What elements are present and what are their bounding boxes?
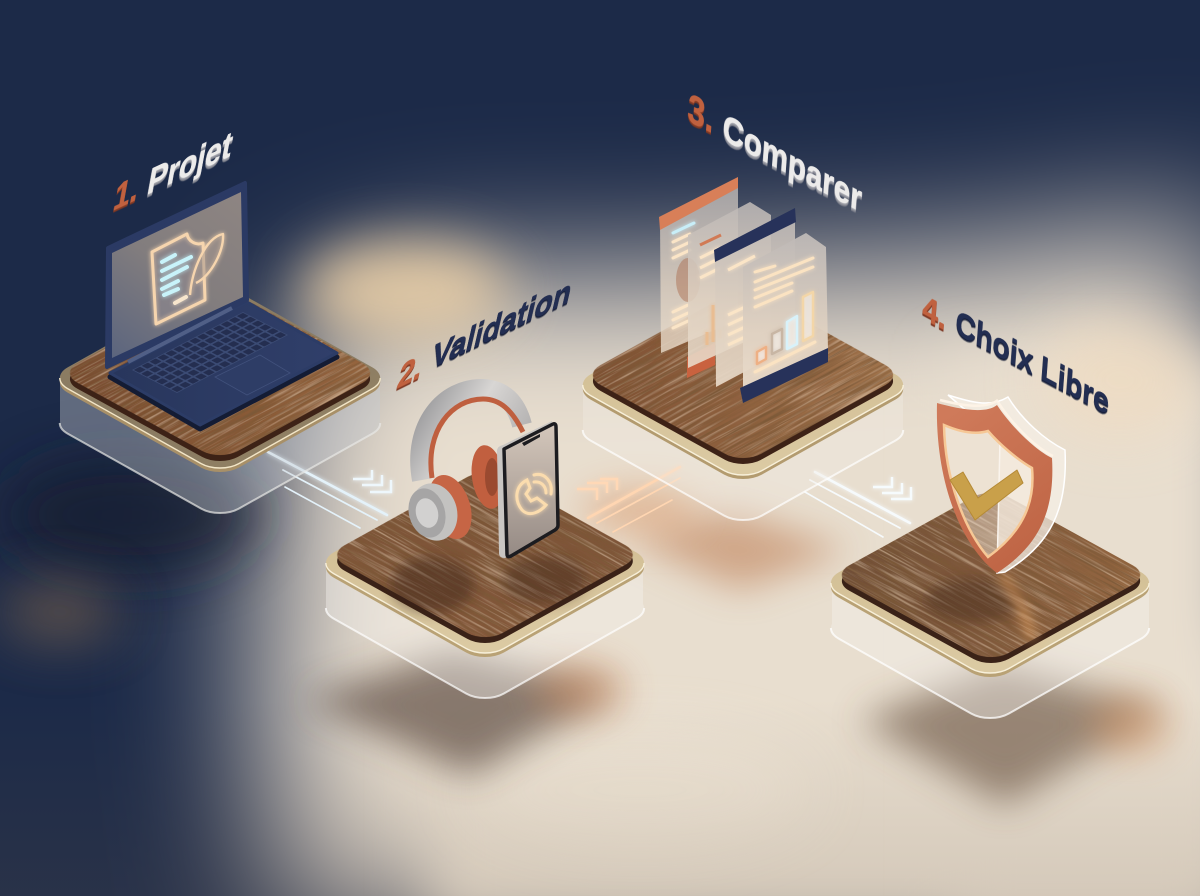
heading: 3. Comparer	[686, 84, 863, 221]
icon: headphones	[403, 389, 523, 546]
document D with bars	[740, 233, 828, 403]
heading: 4. Choix Libre: Choix Libre	[954, 303, 1110, 423]
wooden plate 4	[832, 487, 1150, 669]
panel: step 4 Choix Libre	[820, 288, 1160, 724]
gold rim 3	[572, 289, 914, 485]
heading: 4. Choix Libre: 4.	[921, 288, 947, 339]
icon: call glyph	[517, 474, 551, 514]
document B	[687, 202, 771, 378]
heading: 1. Projet	[110, 122, 236, 219]
gold rim 1	[49, 282, 391, 478]
arrow: chevrons 3 to 4	[873, 477, 911, 499]
arrow: chevrons 2 to 3	[577, 479, 617, 500]
connector: step 1 to 2	[268, 452, 387, 528]
panel: step 3 Comparer	[572, 84, 914, 526]
arrow: chevrons 1 to 2	[353, 470, 391, 492]
glass base 3	[572, 334, 914, 526]
glass base 4	[820, 532, 1160, 724]
heading: 1. Projet: Projet	[144, 122, 236, 203]
heading: 1. Projet: 1.	[110, 166, 143, 219]
icon: comparison documents	[659, 177, 828, 403]
icon: smartphone	[497, 421, 558, 558]
wooden plate 2	[327, 467, 643, 649]
connector: step 2 to 3	[588, 467, 680, 532]
heading: 2. Validation	[394, 271, 576, 397]
heading: 3. Comparer: Comparer	[721, 105, 863, 221]
heading: 2. Validation: 2.	[394, 346, 427, 397]
heading: 2. Validation: Validation	[428, 271, 576, 377]
heading: 3. Comparer: 3.	[686, 84, 715, 142]
wooden plate 3	[583, 286, 903, 470]
glass base 2	[315, 512, 655, 704]
wooden plate 1	[60, 285, 380, 467]
gold rim 4	[820, 487, 1160, 683]
document C navy	[714, 208, 796, 387]
glass base 1	[49, 327, 391, 519]
panel: step 1 Projet	[49, 122, 391, 519]
icon: document and quill	[152, 234, 223, 324]
floating shadows	[305, 488, 1170, 805]
connector: step 3 to 4	[805, 472, 910, 537]
gold rim 2	[315, 467, 655, 663]
icon: shield with check	[937, 395, 1065, 573]
panel: step 2 Validation	[315, 271, 655, 704]
icon: laptop	[107, 183, 337, 429]
document A orange	[659, 177, 738, 353]
